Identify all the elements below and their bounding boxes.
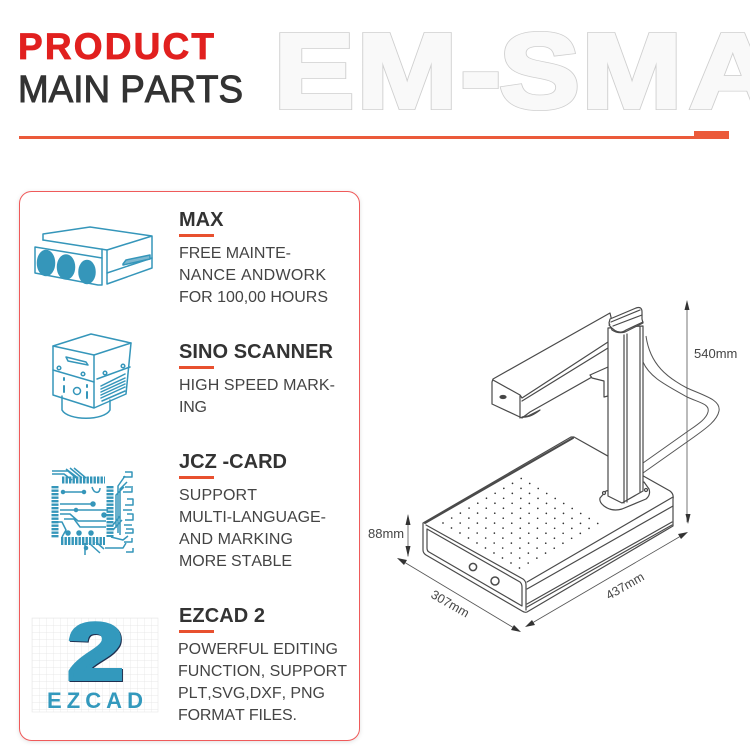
item: max [179,209,328,306]
item: jcz card: MORE STABLE [179,553,292,570]
icon: galvo scanner [53,334,131,418]
header rule [19,131,729,139]
base [423,437,673,612]
dimension: width 307mm [397,558,521,632]
dimension: depth 437mm [525,532,688,627]
column [608,326,643,503]
dimension: height 88mm: 88mm [368,526,404,541]
dimension: depth 437mm: 437mm [604,570,647,603]
item: sino scanner: SINO SCANNER [179,341,334,363]
title: product main parts: MAIN PARTS [18,69,243,111]
title: product main parts [18,26,243,111]
item: ezcad 2: FUNCTION, SUPPORT [178,663,347,680]
icon: ezcad 2 logo: EZCAD [47,688,143,713]
item: sino scanner: HIGH SPEED MARK- [179,377,335,394]
perforated table dots [443,478,598,568]
title: product main parts: PRODUCT [18,26,214,67]
column cap [609,308,643,333]
item: ezcad 2 [178,605,347,724]
arm [492,313,614,418]
dimension: height 540mm: 540mm [694,346,737,361]
icon: control card circuit [52,468,133,555]
item: ezcad 2: POWERFUL EDITING [178,641,338,658]
item: max: NANCE ANDWORK [179,267,326,284]
item: sino scanner [179,341,335,416]
item: ezcad 2: EZCAD 2 [179,605,265,627]
dimension: height 88mm [368,514,410,557]
item: jcz card [179,451,326,570]
machine drawing [423,308,719,612]
column mount [600,482,650,510]
item: max: FOR 100,00 HOURS [179,289,328,306]
dimension: width 307mm: 307mm [428,587,472,620]
item: jcz card: AND MARKING [179,531,293,548]
item: jcz card: JCZ -CARD [179,451,287,473]
item: sino scanner: ING [179,399,207,416]
dimension: height 540mm [684,300,737,524]
scanner bracket [590,367,608,397]
panel: main parts list [20,192,360,740]
icon: ezcad 2 logo: 2 [68,608,124,697]
icon: ezcad 2 logo [32,607,158,713]
icon: laser source [35,227,152,285]
cable [643,336,719,473]
item: jcz card: MULTI-LANGUAGE- [179,509,326,526]
item: max: FREE MAINTE- [179,245,291,262]
item: jcz card: SUPPORT [179,487,257,504]
item: ezcad 2: PLT,SVG,DXF, PNG [178,685,325,702]
icon: ezcad 2 logo: 2 [68,607,124,696]
item: ezcad 2: FORMAT FILES. [178,707,297,724]
item: max: MAX [179,209,224,231]
